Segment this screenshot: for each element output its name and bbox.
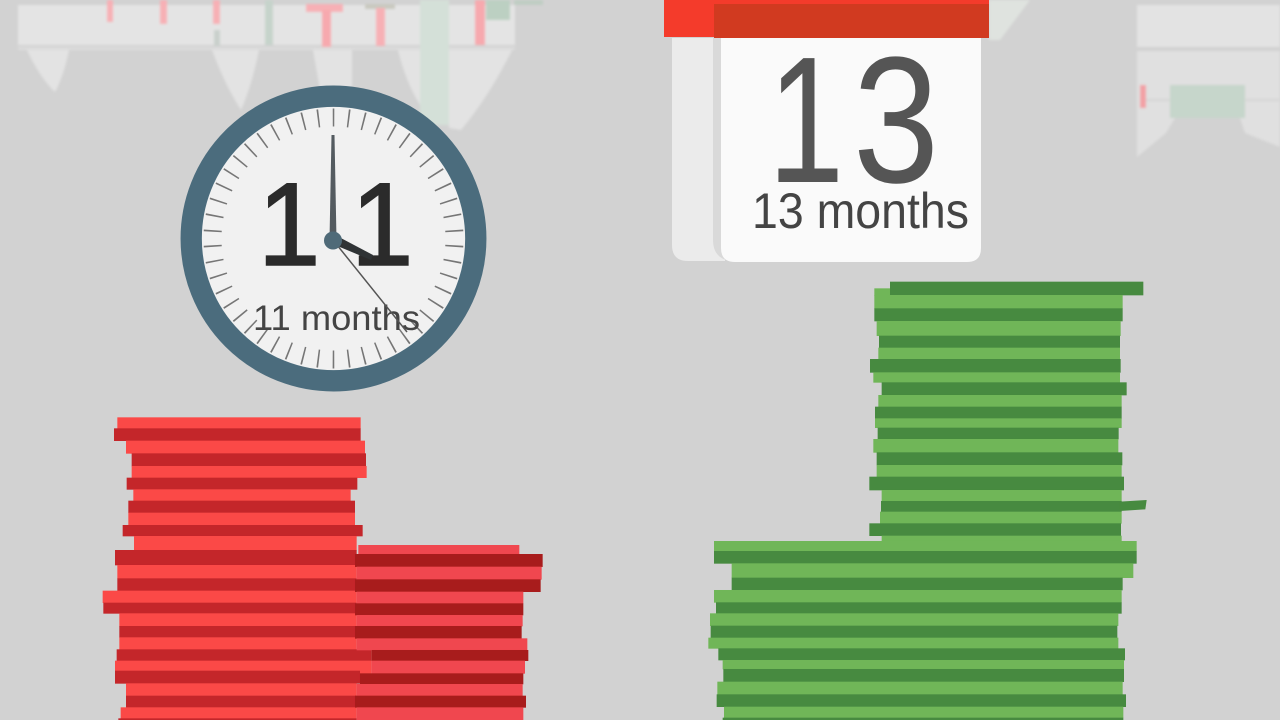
calendar front page	[721, 38, 981, 262]
clock tick marks	[212, 118, 454, 360]
calendar header	[664, 0, 989, 38]
green stack lower column	[708, 541, 1137, 720]
clock hands	[324, 135, 407, 332]
label: 11 months: 11 months	[253, 299, 420, 338]
calendar page shadow	[713, 38, 730, 261]
green stacked bars (13 months)	[708, 282, 1147, 720]
faded background: trading chart right	[989, 0, 1280, 157]
big number 11: 1	[351, 159, 413, 291]
faded background: trading chart left	[18, 0, 543, 130]
icon: calendar showing 13 months	[664, 0, 989, 262]
big number 13: 1	[768, 19, 844, 220]
big number 13: 3	[853, 19, 939, 221]
red stacked bars (11 months)	[103, 417, 543, 720]
red stack left column	[103, 417, 372, 720]
clock rim and face	[191, 96, 476, 381]
big number 11: 1	[258, 159, 320, 291]
red stack right column	[355, 545, 543, 720]
green stack upper column	[869, 282, 1147, 541]
calendar back page	[672, 38, 725, 261]
icon: clock showing 11 months	[191, 96, 476, 381]
big number 13	[768, 19, 939, 221]
big number 11	[258, 159, 413, 291]
label: 13 months: 13 months	[752, 183, 969, 239]
